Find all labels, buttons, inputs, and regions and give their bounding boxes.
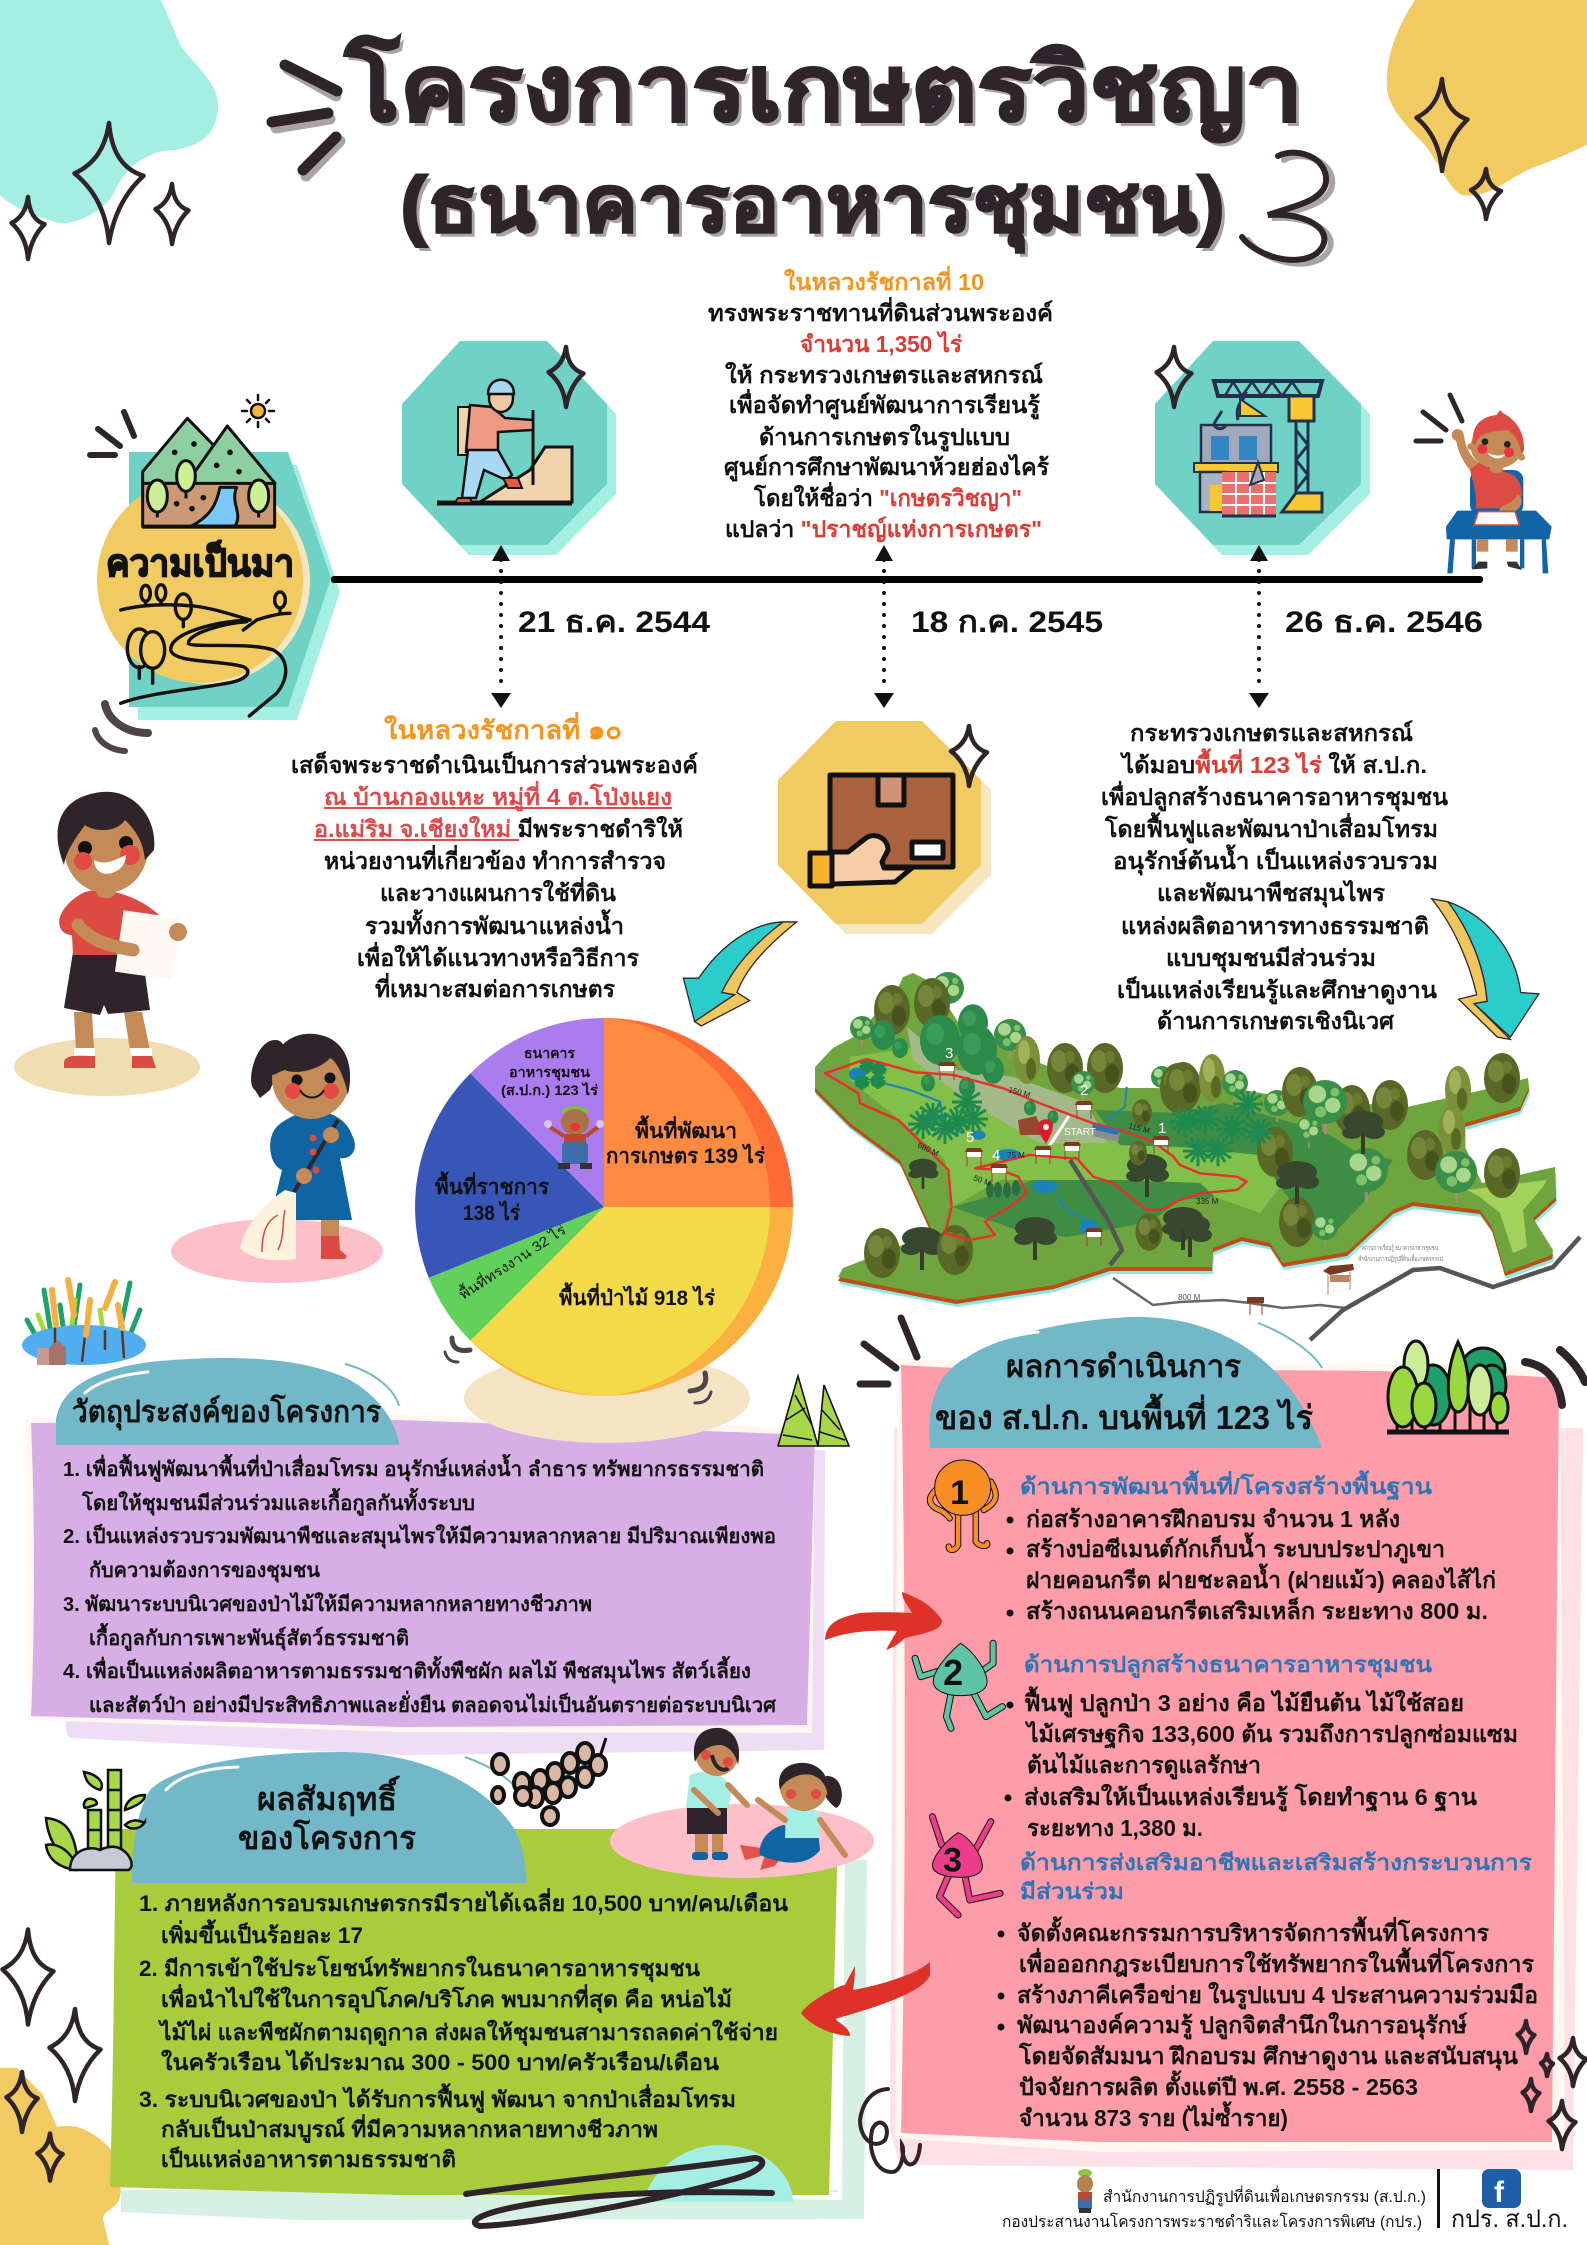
objectives list: กับความต้องการของชุมชน	[89, 1559, 320, 1583]
background blob: top right yellow	[1387, 0, 1587, 196]
icon: seed cluster	[492, 1738, 606, 1825]
section 3 bullets: จำนวน 873 ราย (ไม่ซ้ำราย)	[1019, 2101, 1288, 2131]
panel body	[901, 1365, 1559, 2142]
icon: sun	[242, 395, 274, 427]
icon: facebook	[1482, 2169, 1521, 2209]
section 3 bullets: โดยจัดสัมมนา ฝึกอบรม ศึกษาดูงาน และสนับสนุน	[1018, 2042, 1518, 2071]
block: 10th reign visit text: อ.แม่ริม จ.เชียงใหม่ มีพระราชดำริให้	[314, 815, 683, 842]
heading tab: ผลสัมฤทธิ์	[257, 1775, 401, 1817]
section 3 bullets: สร้างภาคีเครือข่าย ในรูปแบบ 4 ประสานความร่วมมือ	[1017, 1981, 1538, 2010]
date: 21 Dec 2544: 21 ธ.ค. 2544	[518, 606, 710, 639]
outcomes list: ในครัวเรือน ได้ประมาณ 300 - 500 บาท/ครัวเรือน/เดือน	[161, 2049, 719, 2075]
section 2 bullets: ต้นไม้และการดูแลรักษา	[1027, 1751, 1261, 1780]
block: ministry hand-over text: แบบชุมชนมีส่วนร่วม	[1166, 945, 1376, 973]
slice: royal work area 32 rai	[429, 1207, 604, 1341]
sparkles top right	[1416, 79, 1501, 219]
objectives list	[63, 1453, 777, 1717]
map terrain	[850, 1027, 1547, 1253]
map labels	[916, 1045, 1219, 1206]
block: ministry hand-over text: โดยฟื้นฟูและพัฒนาป่าเสื่อมโทรม	[1104, 812, 1438, 844]
slice: food bank 123 rai: (ส.ป.ก.) 123 ไร่	[501, 1081, 598, 1098]
block: 10th reign royal grant text: ทรงพระราชทานที่ดินส่วนพระองค์	[708, 296, 1053, 326]
illustration: two children with pink platform	[610, 1728, 874, 1878]
section 2 bullets	[1004, 1686, 1518, 1841]
organisation names: กองประสานงานโครงการพระราชดำริและโครงการพิเศษ (กปร.)	[1002, 2212, 1422, 2231]
objectives list: 3. พัฒนาระบบนิเวศของป่าไม้ให้มีความหลากหลายทางชีวภาพ	[63, 1592, 592, 1616]
organisation names	[1002, 2185, 1426, 2231]
mascot	[544, 1106, 604, 1169]
outcomes list: เพิ่มขึ้นเป็นร้อยละ 17	[161, 1919, 363, 1948]
signs outside map	[1247, 1244, 1443, 1315]
title	[344, 35, 1307, 257]
timeline bar	[331, 576, 1483, 583]
character: number 2: 2	[943, 1652, 963, 1693]
slice: food bank 123 rai: อาหารชุมชน	[509, 1064, 590, 1081]
map labels: 2	[1080, 1082, 1088, 1099]
map trail	[825, 1059, 1247, 1240]
label: ความเป็นมา: ความเป็นมา	[106, 540, 294, 585]
title swirl	[1242, 153, 1332, 264]
map buildings and pin	[938, 1062, 1170, 1246]
road outside map	[1113, 1278, 1345, 1308]
icon: facebook: f	[1494, 2176, 1505, 2209]
map land	[815, 973, 1556, 1300]
title line 1: โครงการเกษตรวิชญา	[348, 39, 1307, 147]
heading tab: ผลการดำเนินการ	[1006, 1349, 1241, 1384]
sparkles bottom left	[2, 1930, 100, 2180]
heading tab: วัตถุประสงค์ของโครงการ	[72, 1393, 381, 1431]
block: ministry hand-over text: เป็นแหล่งเรียนรู้และศึกษาดูงาน	[1117, 975, 1437, 1005]
pie base ellipse	[464, 1353, 750, 1443]
section 1 bullets: สร้างบ่อซีเมนต์กักเก็บน้ำ ระบบประปาภูเขา	[1026, 1532, 1445, 1564]
panel: objectives	[26, 1358, 825, 1755]
panel border	[895, 1358, 1565, 2152]
block: 10th reign visit text: รวมทั้งการพัฒนาแหล่งน้ำ	[365, 909, 624, 939]
accent strokes near student	[1416, 395, 1462, 441]
panel: results	[890, 1317, 1583, 2170]
octagon: construction 2546	[1155, 341, 1370, 555]
map labels: 50 M	[972, 1173, 992, 1188]
block: 10th reign visit text: เพื่อให้ได้แนวทางหรือวิธีการ	[357, 941, 640, 971]
icon: construction site	[1194, 381, 1322, 516]
block: 10th reign royal grant text: เพื่อจัดทำศูนย์พัฒนาการเรียนรู้	[729, 388, 1041, 420]
arrow: dotted 2546	[1249, 545, 1269, 708]
title line 2: (ธนาคารอาหารชุมชน)	[400, 160, 1225, 253]
block: 10th reign visit text	[291, 711, 698, 1002]
octagon: climber 2544	[402, 341, 616, 555]
section 3 bullets: จัดตั้งคณะกรรมการบริหารจัดการพื้นที่โครงการ	[1017, 1916, 1490, 1946]
slice: forest 918 rai	[470, 1207, 793, 1396]
accent strokes above ความเป็นมา	[90, 412, 134, 455]
block: ministry hand-over text: แหล่งผลิตอาหารทางธรรมชาติ	[1121, 913, 1429, 939]
objectives list: และสัตว์ป่า อย่างมีประสิทธิภาพและยั่งยืน ตลอดจนไม่เป็นอันตรายต่อระบบนิเวศ	[89, 1690, 777, 1717]
mint blob with squiggle	[466, 2145, 793, 2226]
illustration: project map: 800 M	[1178, 1293, 1201, 1302]
section 2 bullets: ไม้เศรษฐกิจ 133,600 ต้น รวมถึงการปลูกซ่อมแซม	[1024, 1720, 1518, 1749]
outcomes list	[139, 1887, 788, 2172]
icon: trees	[1387, 1341, 1509, 1433]
slice: food bank 123 rai: ธนาคาร	[524, 1045, 575, 1061]
pie chart	[415, 1018, 793, 1396]
outcomes list: 2. มีการเข้าใช้ประโยชน์ทรัพยากรในธนาคารอาหารชุมชน	[139, 1955, 700, 1983]
character: number 2	[915, 1643, 1002, 1728]
block: 10th reign royal grant text: โดยให้ชื่อว่า "เกษตรวิชญา"	[753, 481, 1022, 512]
panel body	[110, 1829, 838, 2195]
map trees	[850, 972, 1520, 1278]
slice: agricultural development 139 rai: พื้นที่พัฒนา	[635, 1115, 737, 1143]
sparkles bottom right	[1518, 2021, 1586, 2149]
block: 10th reign royal grant text: ในหลวงรัชกาลที่ 10	[784, 265, 984, 295]
arrow: red to outcomes	[801, 1962, 930, 2036]
background blob: bottom left yellow	[0, 2068, 121, 2245]
doodle spiral	[860, 2089, 920, 2172]
title line 1: โครงการเกษตรวิชญา	[344, 35, 1303, 143]
section heading 3	[1020, 1850, 1532, 1904]
panel: outcomes	[110, 1752, 867, 2226]
section 2 bullets: ระยะทาง 1,380 ม.	[1027, 1815, 1203, 1841]
slice: agricultural development 139 rai: การเกษตร 139 ไร่	[606, 1143, 766, 1168]
arrow: red to results	[825, 1592, 942, 1650]
panel body	[31, 1420, 815, 1727]
accent arcs below ความเป็นมา	[95, 704, 148, 751]
section 3 bullets: ปัจจัยการผลิต ตั้งแต่ปี พ.ศ. 2558 - 2563	[1019, 2070, 1418, 2100]
platform	[14, 1038, 200, 1096]
illustration: student at desk	[1446, 410, 1552, 573]
illustration: girl with broom	[171, 1034, 383, 1283]
organisation names: สำนักงานการปฏิรูปที่ดินเพื่อเกษตรกรรม (ส.ป.ก.)	[1103, 2185, 1426, 2207]
block: 10th reign visit text: เสด็จพระราชดำเนินเป็นการส่วนพระองค์	[291, 750, 698, 778]
block: 10th reign visit text: และวางแผนการใช้ที่ดิน	[380, 876, 616, 906]
block: background hexagon with ความเป็นมา	[97, 395, 340, 720]
objectives list: 1. เพื่อฟื้นฟูพัฒนาพื้นที่ป่าเสื่อมโทรม อนุรักษ์แหล่งน้ำ ลำธาร ทรัพยากรธรรมชาติ	[63, 1453, 764, 1483]
slice: food bank 123 rai	[470, 1018, 604, 1207]
section heading 2: ด้านการปลูกสร้างธนาคารอาหารชุมชน	[1024, 1652, 1432, 1679]
heading tab	[132, 1752, 526, 1883]
slice: government area 138 rai	[415, 1073, 604, 1278]
section 1 bullets: ก่อสร้างอาคารฝึกอบรม จำนวน 1 หลัง	[1026, 1506, 1400, 1532]
map labels: 5	[966, 1129, 974, 1146]
block: ministry hand-over text	[1101, 720, 1448, 1034]
map labels: 4	[992, 1147, 1000, 1164]
accent strokes beside pie	[445, 1338, 470, 1362]
section 3 bullets	[998, 1916, 1538, 2131]
panel border	[120, 1835, 845, 2200]
icon: mountains and stream	[142, 418, 275, 527]
heading tab: ของ ส.ป.ก. บนพื้นที่ 123 ไร่	[935, 1393, 1313, 1436]
background blob: top left teal	[0, 0, 218, 223]
block: 10th reign royal grant text: ด้านการเกษตรในรูปแบบ	[759, 423, 1010, 452]
panel shadow	[121, 1860, 867, 2220]
sparkle	[1157, 347, 1191, 407]
block: ministry hand-over text: อนุรักษ์ต้นน้ำ เป็นแหล่งรวบรวม	[1113, 844, 1438, 876]
objectives list: 4. เพื่อเป็นแหล่งผลิตอาหารตามธรรมชาติทั้งพืชผัก ผลไม้ พืชสมุนไพร สัตว์เลี้ยง	[63, 1655, 751, 1684]
panel shadow	[890, 1428, 1583, 2170]
outcomes list: 1. ภายหลังการอบรมเกษตรกรมีรายได้เฉลี่ย 10,500 บาท/คน/เดือน	[139, 1887, 788, 1916]
block: 10th reign royal grant text	[708, 265, 1053, 543]
heading tab	[56, 1358, 399, 1445]
character: number 3	[932, 1817, 1000, 1915]
arrow: dotted 2544	[491, 545, 511, 708]
block: 10th reign visit text: ในหลวงรัชกาลที่ ๑๐	[384, 711, 622, 745]
character: number 3: 3	[943, 1842, 962, 1880]
sparkle	[951, 726, 987, 786]
map road	[1070, 1160, 1122, 1265]
block: 10th reign royal grant text: ศูนย์การศึกษาพัฒนาห้วยฮ่องไคร้	[724, 453, 1050, 482]
heading tab: ของโครงการ	[238, 1819, 416, 1856]
character: number 1	[930, 1460, 996, 1550]
panel border	[26, 1415, 815, 1733]
platform	[171, 1219, 383, 1283]
arrow: dotted 2545	[874, 545, 894, 708]
section heading 3: ด้านการส่งเสริมอาชีพและเสริมสร้างกระบวนการ	[1020, 1850, 1532, 1875]
block: 10th reign royal grant text: จำนวน 1,350 ไร่	[800, 330, 963, 357]
slice: government area 138 rai: พื้นที่ราชการ	[435, 1171, 550, 1199]
section 1 bullets: สร้างถนนคอนกรีตเสริมเหล็ก ระยะทาง 800 ม.	[1026, 1596, 1488, 1624]
arrow: teal 3D pointing to pie	[683, 922, 797, 1026]
map labels: START	[1064, 1127, 1096, 1138]
slice: royal work area 32 rai: พื้นที่ทรงงาน 32 ไร่	[455, 1220, 569, 1303]
date: 18 Jul 2545: 18 ก.ค. 2545	[911, 606, 1103, 639]
signs outside map: สำนักงานการปฏิรูปที่ดินเพื่อเกษตรกรรม	[1358, 1254, 1443, 1263]
outcomes list: กลับเป็นป่าสมบูรณ์ ที่มีความหลากหลายทางชีวภาพ	[161, 2113, 658, 2144]
map land edge	[815, 977, 1557, 1307]
arrow: teal 3D pointing to map	[1432, 899, 1539, 1039]
outcomes list: 3. ระบบนิเวศของป่า ได้รับการฟื้นฟู พัฒนา จากป่าเสื่อมโทรม	[139, 2083, 736, 2114]
illustration: project map	[815, 972, 1580, 1340]
icon: box in hand	[810, 775, 953, 886]
map labels: 150 M	[1007, 1085, 1032, 1100]
section 2 bullets: ฟื้นฟู ปลูกป่า 3 อย่าง คือ ไม้ยืนต้น ไม้ใช้สอย	[1024, 1686, 1464, 1718]
block: 10th reign visit text: หน่วยงานที่เกี่ยวข้อง ทำการสำรวจ	[324, 844, 666, 874]
signs outside map: สถานการเรียนรู้ ธนาคารอาหารชุมชน	[1362, 1244, 1438, 1252]
accent strokes left of results tab	[860, 1318, 917, 1384]
block: ministry hand-over text: และพัฒนาพืชสมุนไพร	[1157, 879, 1386, 908]
slice: forest 918 rai: พื้นที่ป่าไม้ 918 ไร่	[559, 1282, 716, 1310]
pink platform	[610, 1804, 874, 1878]
section heading 1: ด้านการพัฒนาพื้นที่/โครงสร้างพื้นฐาน	[1020, 1470, 1432, 1501]
map labels: 1	[1158, 1120, 1166, 1137]
map labels: 680 M	[916, 1141, 940, 1158]
map water	[819, 1063, 1127, 1234]
title line 2: (ธนาคารอาหารชุมชน)	[404, 164, 1229, 257]
block: 10th reign royal grant text: แปลว่า "ปราชญ์แห่งการเกษตร"	[725, 516, 1042, 543]
block: ministry hand-over text: ได้มอบพื้นที่ 123 ไร่ ให้ ส.ป.ก.	[1119, 748, 1427, 778]
illustration: pond with reeds	[22, 1280, 146, 1365]
date: 26 Dec 2546: 26 ธ.ค. 2546	[1285, 606, 1483, 639]
block: ministry hand-over text: เพื่อปลูกสร้างธนาคารอาหารชุมชน	[1101, 780, 1448, 812]
octagon: box handover 2545	[778, 721, 991, 934]
block: ministry hand-over text: กระทรวงเกษตรและสหกรณ์	[1130, 720, 1413, 746]
map labels: 115 M	[1127, 1121, 1151, 1136]
title accent strokes	[272, 65, 340, 176]
objectives list: โดยให้ชุมชนมีส่วนร่วมและเกื้อกูลกันทั้งระบบ	[81, 1487, 475, 1517]
heading tab	[929, 1317, 1322, 1448]
social label: กปร. ส.ป.ก.	[1451, 2206, 1568, 2233]
section 2 bullets: ส่งเสริมให้เป็นแหล่งเรียนรู้ โดยทำฐาน 6 ฐาน	[1024, 1782, 1477, 1812]
icon: bamboo	[46, 1770, 145, 1870]
block: 10th reign royal grant text: ให้ กระทรวงเกษตรและสหกรณ์	[725, 361, 1043, 388]
footer	[1002, 2169, 1568, 2233]
sparkle	[549, 347, 583, 407]
map labels: 335 M	[1196, 1197, 1219, 1206]
section 1 bullets: ฝายคอนกรีต ฝายชะลอน้ำ (ฝายแม้ว) คลองไส้ไก่	[1026, 1563, 1496, 1593]
panel shadow	[66, 1450, 825, 1755]
objectives list: เกื้อกูลกับการเพาะพันธุ์สัตว์ธรรมชาติ	[89, 1622, 409, 1652]
map labels: 75 M	[1007, 1151, 1025, 1160]
outcomes list: เพื่อนำไปใช้ในการอุปโภค/บริโภค พบมากที่สุด คือ หน่อไม้	[161, 1983, 732, 2014]
block: ministry hand-over text: ด้านการเกษตรเชิงนิเวศ	[1157, 1008, 1394, 1034]
section 3 bullets: เพื่อออกกฎระเบียบการใช้ทรัพยากรในพื้นที่โครงการ	[1019, 1947, 1535, 1977]
mascot small	[1077, 2169, 1093, 2213]
section heading 3: มีส่วนร่วม	[1020, 1879, 1124, 1904]
girl	[740, 1763, 845, 1870]
accent strokes under pie	[690, 1373, 711, 1403]
section 1 bullets	[1006, 1506, 1496, 1624]
map labels: 3	[945, 1045, 953, 1062]
icon: climber	[437, 380, 572, 503]
sparkles top left	[12, 123, 188, 259]
boy	[686, 1728, 747, 1860]
objectives list: 2. เป็นแหล่งรวบรวมพัฒนาพืชและสมุนไพรให้มีความหลากหลาย มีปริมาณเพียงพอ	[63, 1522, 776, 1549]
slice: agricultural development 139 rai	[604, 1018, 793, 1207]
section 3 bullets: พัฒนาองค์ความรู้ ปลูกจิตสำนึกในการอนุรักษ์	[1017, 2011, 1468, 2040]
block: 10th reign visit text: ณ บ้านกองแหะ หมู่ที่ 4 ต.โป่งแยง	[324, 780, 672, 812]
icon: winding road with trees	[121, 585, 290, 716]
accent strokes right of results panel	[1525, 1350, 1585, 1405]
outcomes list: เป็นแหล่งอาหารตามธรรมชาติ	[161, 2145, 456, 2172]
slice: government area 138 rai: 138 ไร่	[463, 1200, 521, 1225]
block: 10th reign visit text: ที่เหมาะสมต่อการเกษตร	[375, 972, 616, 1002]
outcomes list: ไม้ไผ่ และพืชผักตามฤดูกาล ส่งผลให้ชุมชนสามารถลดค่าใช้จ่าย	[158, 2019, 778, 2047]
illustration: boy with paper	[14, 792, 200, 1096]
character: number 1: 1	[950, 1474, 969, 1512]
icon: bamboo shoots	[778, 1376, 849, 1446]
